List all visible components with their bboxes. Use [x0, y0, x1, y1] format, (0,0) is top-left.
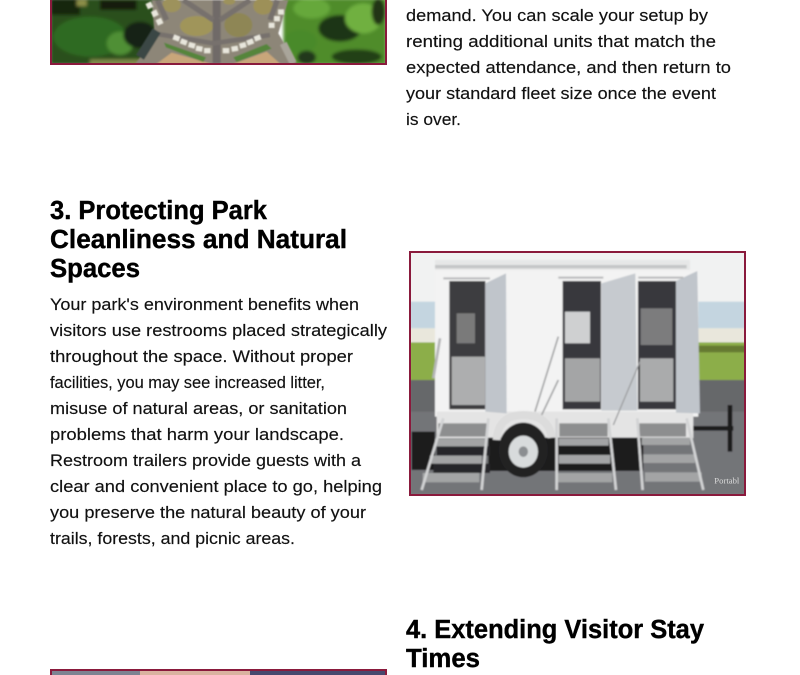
text block: scaling for demand [406, 7, 731, 129]
text block: scaling for demand: is over. [406, 111, 461, 129]
text block: protecting park cleanliness: Restroom trailers provide guests with a [50, 452, 362, 470]
heading: section 3: Spaces [50, 255, 140, 283]
text block: scaling for demand: renting additional units that match the [406, 33, 716, 51]
text block: protecting park cleanliness: problems that harm your landscape. [50, 426, 344, 444]
text block: protecting park cleanliness: trails, forests, and picnic areas. [50, 530, 295, 548]
text block: protecting park cleanliness: misuse of natural areas, or sanitation [50, 400, 347, 418]
photo: white restroom trailer with three doors [410, 252, 747, 495]
text block: scaling for demand: demand. You can scale your setup by [406, 7, 709, 25]
heading: section 3: Cleanliness and Natural [50, 226, 347, 254]
text block: protecting park cleanliness: throughout the space. Without proper [50, 348, 354, 366]
text block: protecting park cleanliness: facilities, you may see increased litter, [50, 374, 325, 392]
text block: protecting park cleanliness: you preserve the natural beauty of your [50, 504, 367, 522]
photo: aerial view of park event crowd [50, 0, 387, 66]
heading: section 3: 3. Protecting Park [50, 197, 268, 225]
text block: scaling for demand: your standard fleet size once the event [406, 85, 716, 103]
text block: protecting park cleanliness: clear and convenient place to go, helping [50, 478, 382, 496]
photo: top edge of section 4 image [50, 669, 387, 675]
text block: scaling for demand: expected attendance, and then return to [406, 59, 731, 77]
photo: white restroom trailer with three doors: Portabl [714, 476, 740, 486]
heading: section 3 [50, 197, 347, 283]
heading: section 4 [406, 616, 705, 673]
text block: protecting park cleanliness [50, 296, 388, 548]
heading: section 4: Times [406, 645, 480, 673]
text block: protecting park cleanliness: visitors use restrooms placed strategically [50, 322, 388, 340]
text block: protecting park cleanliness: Your park's environment benefits when [50, 296, 359, 314]
heading: section 4: 4. Extending Visitor Stay [406, 616, 705, 644]
